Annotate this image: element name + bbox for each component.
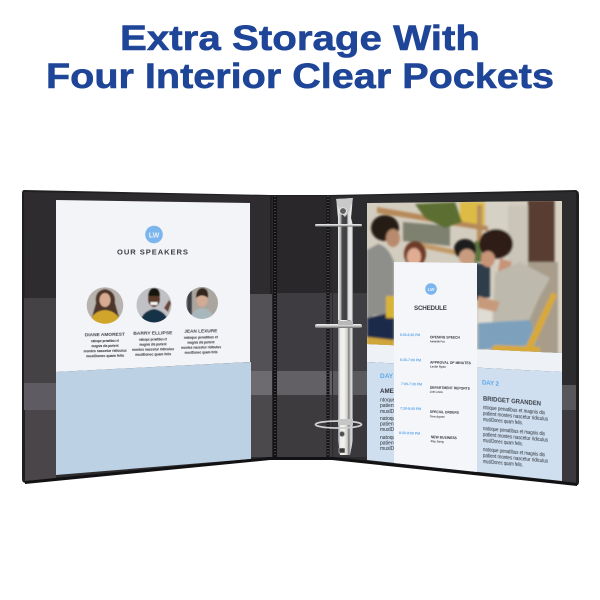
agenda row 1 (400, 333, 460, 344)
agenda row 2 (400, 358, 472, 369)
agenda row 1: Amanda Fox (430, 339, 445, 343)
icon: speakers logo (145, 226, 163, 243)
day 1 column: natoque (380, 435, 398, 441)
day 2 column: DAY 2 (482, 379, 499, 388)
ring: middle (315, 321, 362, 328)
agenda rows (399, 333, 472, 444)
speaker bio: Barry Ellipse: BARRY ELLIPSE (133, 330, 172, 336)
agenda row 4: Tom Agnes (430, 414, 445, 419)
speaker bio: Jean Lexure: JEAN LEXURE (184, 328, 217, 334)
metal back plate (336, 198, 353, 455)
speaker bio: Jean Lexure: montes nascetur ridiculus (181, 344, 222, 350)
speaker bio: Barry Ellipse: montes nascetur ridiculus (132, 346, 175, 352)
day 1 column (380, 373, 406, 452)
day 2 column: patient montes nascetur ridiculus (483, 432, 548, 444)
day 1 column: muslDonec (380, 446, 406, 452)
agenda row 3: 7:00-7:30 PM (401, 382, 422, 387)
portrait: Jean (186, 287, 218, 319)
day 2 column (482, 379, 548, 471)
photo: people in a cafe (365, 198, 565, 356)
ring: bottom (316, 419, 362, 428)
day 1 column: ntoque (380, 398, 396, 404)
speaker bio: Barry Ellipse (132, 330, 175, 357)
speaker bio: Jean Lexure: magnis dis parient (187, 339, 215, 345)
right paper: photo and days (365, 198, 565, 481)
day 1 column: DAY 1 (380, 373, 399, 380)
woman right (479, 229, 513, 259)
walls (485, 200, 509, 265)
ring mechanism (315, 198, 362, 455)
shelves and hood (403, 222, 450, 246)
day 2 column: natoque penatibus et magnis dis (483, 447, 545, 458)
cover bottom edge shadow (25, 457, 577, 486)
day 1 column: patient (380, 440, 396, 446)
agenda row 2: 6:30-7:00 PM (400, 358, 421, 362)
open binder (22, 190, 579, 486)
day 1 column: natoque (380, 416, 398, 422)
agenda row 4: SPECIAL ORDERS (430, 410, 459, 415)
right cover interior (332, 192, 576, 483)
day 2 column: muslDonec quam felis. (483, 417, 523, 426)
man with glasses (454, 239, 476, 259)
icon: schedule logo (425, 283, 437, 295)
speaker bio: Barry Ellipse: muslDonec quam felis (135, 351, 172, 357)
day 2 column: patient montes nascetur ridiculus (483, 411, 548, 423)
agenda row 5: Ray Song (431, 439, 444, 444)
agenda row 3: DEPARTMENT REPORTS (430, 386, 470, 391)
agenda row 4: 7:30-8:00 PM (400, 407, 421, 411)
agenda row 5 (399, 431, 458, 444)
agenda row 4 (400, 407, 460, 419)
day 2 column: muslDonec quam felis. (483, 459, 523, 468)
day 1 column: AMELIA (380, 388, 404, 395)
agenda row 5: NEW BUSINESS (431, 435, 457, 440)
title (46, 18, 554, 96)
speaker bio: Diane Amorest: muslDonec quam felis (86, 353, 125, 358)
agenda row 5: 8:30-9:00 PM (399, 431, 420, 436)
speaker bio: Diane Amorest: DIANE AMOREST (85, 332, 125, 337)
heading: schedule: SCHEDULE (414, 305, 447, 312)
day 2 column: natoque penatibus et magnis dis (483, 426, 545, 437)
day 1 column: muslDonec (380, 427, 406, 433)
speaker bio: Diane Amorest: natoque penatibus et (91, 338, 119, 343)
day 2 column: muslDonec quam felis. (483, 438, 523, 447)
woman in background (404, 241, 426, 267)
day 1 column: patient (380, 422, 396, 428)
left cover interior (24, 192, 272, 481)
speaker bio: Jean Lexure (181, 328, 222, 355)
heading: our speakers: OUR SPEAKERS (117, 248, 188, 256)
day 2 column: ntoque penatibus et magnis dis (483, 405, 545, 416)
agenda row 2: Leslie Ryan (430, 365, 446, 369)
speaker bio: Barry Ellipse: natoque penatibus et (139, 336, 167, 342)
agenda row 1: 6:00-6:30 PM (400, 333, 420, 337)
speaker bio: Jean Lexure: natoque penatibus et (184, 334, 218, 340)
agenda row 2: APPROVAL OF MINUTES (430, 361, 471, 365)
title: Four Interior Clear Pockets (46, 56, 554, 96)
icon: speakers logo: LW (149, 232, 160, 240)
speaker bio: Diane Amorest (83, 332, 127, 358)
icon: schedule logo: LW (428, 287, 435, 292)
agenda row 3: Joel Lewis (430, 390, 443, 394)
title: Extra Storage With (120, 18, 480, 58)
day 2 column: BRIDGET GRANDEN (483, 396, 541, 408)
left paper: our speakers (56, 200, 251, 475)
day 1 column: muslDonec (380, 409, 406, 415)
binder cover (22, 190, 579, 485)
portrait: Diane (86, 287, 124, 324)
binder spine (272, 196, 332, 458)
man left (371, 215, 399, 241)
day 1 column: patient (380, 403, 396, 409)
agenda row 3 (401, 382, 471, 395)
speaker bio: Jean Lexure: muslDonec quam felis (185, 349, 218, 355)
blue lower section (56, 362, 251, 475)
speaker bio: Diane Amorest: magnis dis parient (91, 343, 119, 348)
day 2 column: patient montes nascetur ridiculus (483, 453, 548, 465)
agenda row 1: OPENING SPEECH (430, 335, 460, 340)
speaker bio: Barry Ellipse: magnis dis parient (139, 341, 167, 347)
speaker bio: Diane Amorest: montes nascetur ridiculus (84, 348, 127, 353)
ring: top (315, 224, 362, 227)
schedule card (394, 262, 477, 472)
portrait: Barry (136, 288, 172, 322)
